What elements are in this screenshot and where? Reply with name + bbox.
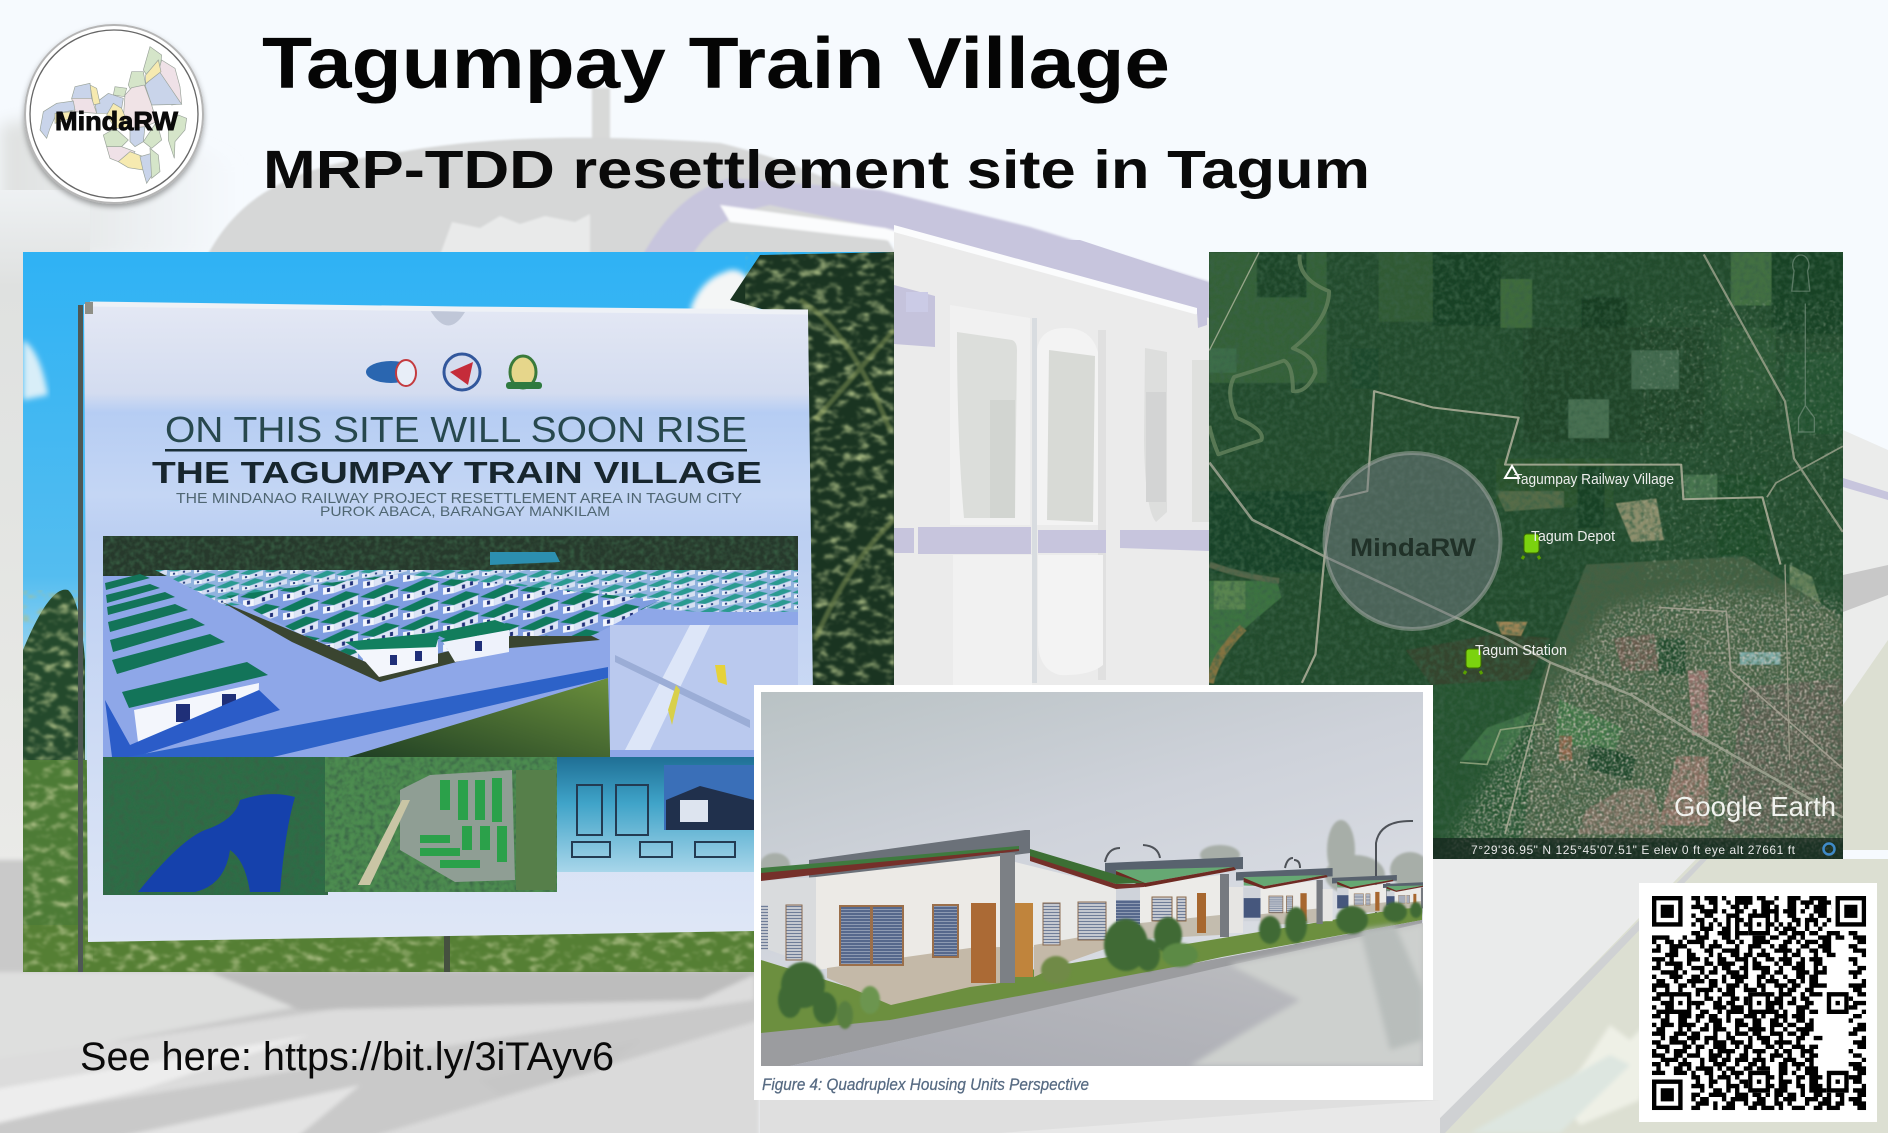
map: MindaRW watermark: MindaRW [1350, 534, 1476, 562]
map: depot marker [1522, 529, 1615, 559]
card: walkway [761, 920, 1422, 1066]
QR code [1639, 883, 1877, 1122]
map: fields and urban patches [1209, 252, 1843, 842]
background: left hill and body [0, 118, 240, 990]
background: train side panel with windows [894, 225, 1209, 690]
card: grass [761, 908, 1422, 1033]
map: roads and river [1209, 252, 1843, 834]
satellite map panel [1209, 252, 1843, 859]
card: rendered image [760, 692, 1430, 1066]
QR: modules [1652, 896, 1866, 1110]
map: Google Earth watermark: Google Earth [1674, 791, 1836, 822]
logo: MindaRW badge [25, 25, 203, 203]
map: coordinates bar [1433, 838, 1843, 859]
map: station marker [1464, 643, 1567, 674]
card: road [790, 923, 1423, 1066]
background: lower streaks right [760, 850, 1888, 1133]
photo: banner text [152, 409, 762, 519]
house rendering card [754, 685, 1433, 1100]
background: lower streaks left [0, 860, 760, 1133]
card: caption: Figure 4: Quadruplex Housing Units Perspective [762, 1075, 1089, 1094]
photo: banner [84, 304, 816, 942]
photo: site billboard [23, 252, 894, 972]
map: village marker [1505, 466, 1674, 488]
photo: sky [23, 252, 892, 760]
link text: See here: https://bit.ly/3iTAyv6 [80, 1035, 614, 1079]
subtitle: MRP-TDD resettlement site in Tagum [263, 140, 1370, 200]
photo: cloud [690, 270, 760, 320]
photo: rendered subdivision on banner [103, 536, 798, 758]
QR: right edge modules [1849, 938, 1866, 1108]
card: bushes [778, 902, 1422, 1029]
photo: palms left and grass [23, 305, 763, 972]
logo: Mindanao map [40, 47, 187, 183]
photo: banner text: THE MINDANAO RAILWAY PROJECT RESETTLEMENT AREA IN TAGUM CITY [176, 490, 742, 507]
map: coordinates bar: 7°29'36.95" N 125°45'07.51" E elev 0 ft eye alt 27661 ft [1471, 843, 1796, 857]
title: Tagumpay Train Village [262, 24, 1170, 104]
map: darkening and texture [1209, 252, 1843, 859]
photo: banner text: THE TAGUMPAY TRAIN VILLAGE [152, 455, 762, 490]
card: first house [761, 830, 1144, 1005]
photo: row of roofs [105, 574, 268, 708]
map: station marker: Tagum Station [1475, 643, 1567, 659]
logo: wordmark: MindaRW [55, 106, 178, 136]
photo: palms right [730, 252, 894, 685]
map: depot marker: Tagum Depot [1531, 529, 1615, 545]
QR: finder and alignment patterns [1652, 896, 1866, 1110]
photo: lower banner panels [103, 757, 759, 895]
map: MindaRW watermark [1324, 453, 1500, 629]
background: right side strip [1843, 430, 1888, 850]
map: village marker: Tagumpay Railway Village [1514, 472, 1674, 488]
card: background trees [760, 820, 1430, 895]
background: train roof [205, 88, 1210, 320]
photo: banner text: PUROK ABACA, BARANGAY MANKILAM [320, 503, 610, 519]
photo: banner text: ON THIS SITE WILL SOON RISE [165, 409, 747, 450]
card: street lamps [1104, 820, 1413, 913]
photo: banner logos [366, 354, 542, 390]
card: further houses [1105, 857, 1243, 939]
